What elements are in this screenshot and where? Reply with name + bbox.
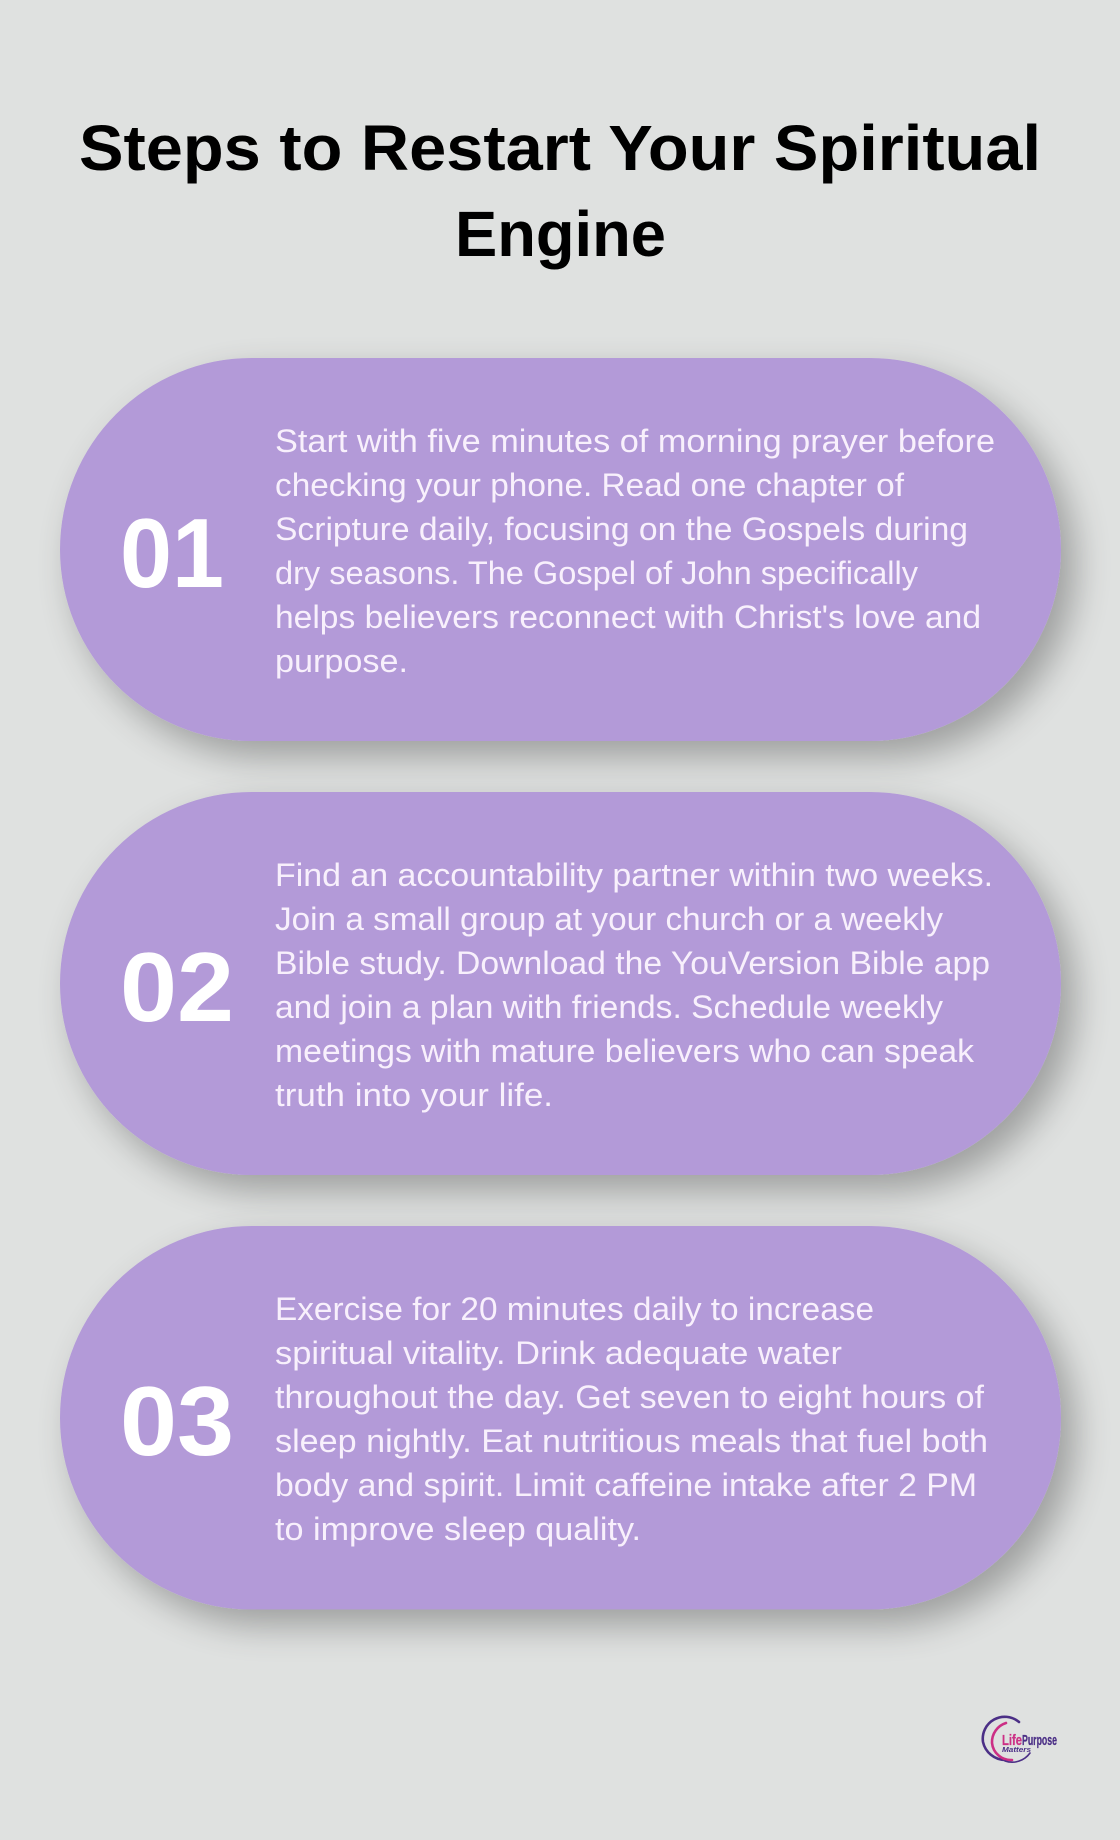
logo: Life Purpose Matters [983,1717,1057,1762]
number 03: 03 [120,1366,234,1476]
body text 03: spiritual vitality. Drink adequate water [275,1335,842,1371]
body text 02: Find an accountability partner within two weeks. [275,857,993,893]
body text 03 [275,1291,988,1547]
pill background 02 [60,792,1061,1175]
logo tagline: Matters [1002,1745,1031,1754]
body text 02: meetings with mature believers who can speak [275,1033,975,1069]
body text 02 [275,857,993,1113]
title [79,112,1041,270]
body text 02: Join a small group at your church or a weekly [275,901,943,937]
body text 02: and join a plan with friends. Schedule weekly [275,989,943,1025]
panel: step 01 [60,358,1061,741]
body text 01: Start with five minutes of morning prayer before [275,423,995,459]
panel: step 03 [60,1226,1061,1610]
body text 03: body and spirit. Limit caffeine intake after 2 PM [275,1467,977,1503]
body text 01: dry seasons. The Gospel of John specifically [275,555,918,591]
body text 03: sleep nightly. Eat nutritious meals that fuel both [275,1423,988,1459]
pill background 01 [60,358,1061,741]
number 01: 01 [120,498,224,608]
panel: step 02 [60,792,1061,1175]
title: Steps to Restart Your Spiritual [79,112,1041,184]
pill background 03 [60,1226,1061,1610]
body text 03: Exercise for 20 minutes daily to increase [275,1291,874,1327]
body text 01: Scripture daily, focusing on the Gospels during [275,511,968,547]
number 02: 02 [120,932,234,1042]
body text 02: Bible study. Download the YouVersion Bible app [275,945,990,981]
logo arcs [983,1717,1030,1762]
body text 02: truth into your life. [275,1077,553,1113]
body text 01: checking your phone. Read one chapter of [275,467,904,503]
body text 01 [275,423,995,679]
title: Engine [455,198,666,270]
body text 01: helps believers reconnect with Christ's love and [275,599,981,635]
body text 03: throughout the day. Get seven to eight hours of [275,1379,984,1415]
logo wordmark: Life [1002,1732,1022,1749]
logo: Life Purpose Matters: Purpose [1022,1732,1057,1749]
body text 01: purpose. [275,643,408,679]
body text 03: to improve sleep quality. [275,1511,641,1547]
